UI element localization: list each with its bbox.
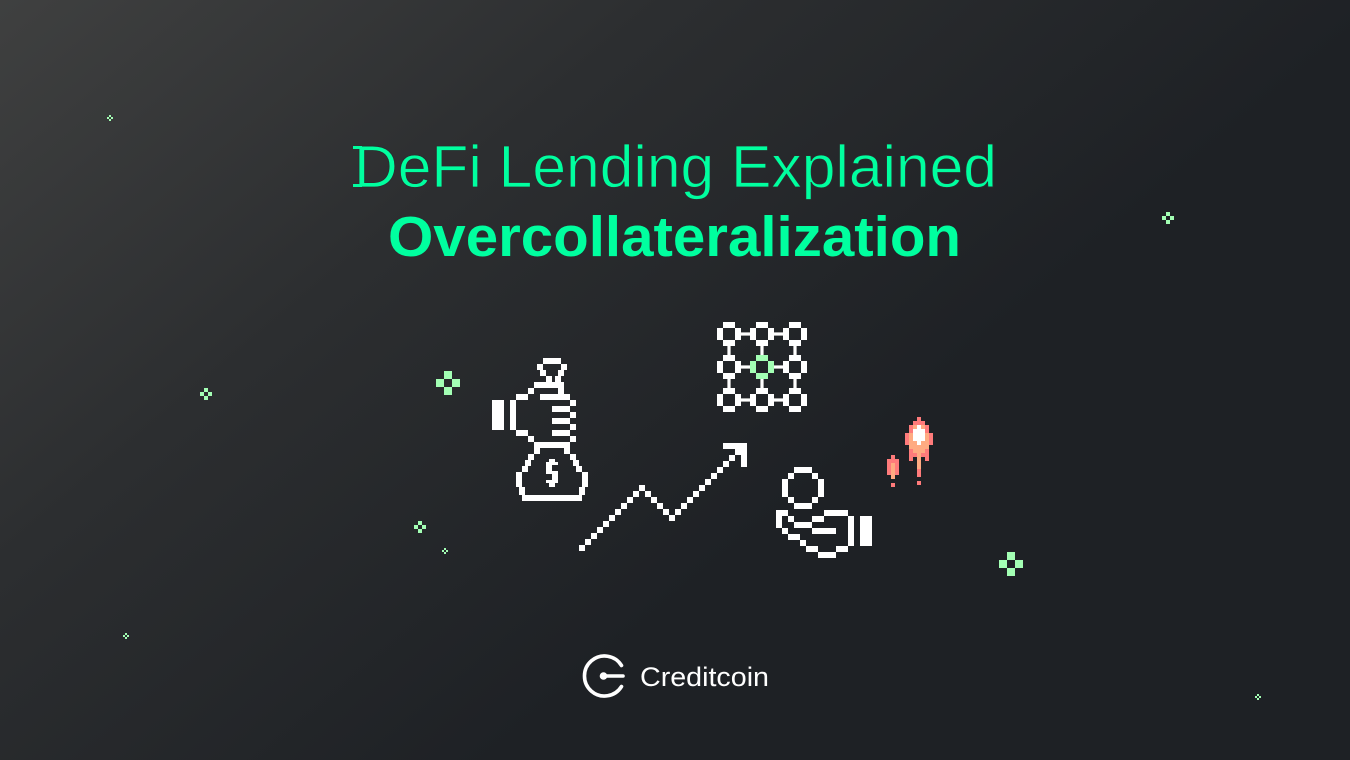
outer nodes bbox=[717, 322, 807, 412]
dollar sign bbox=[546, 459, 558, 487]
icon: large rocket bbox=[905, 417, 933, 485]
sparkle bbox=[999, 552, 1023, 576]
title line: DeFi Lending Explained: DeFi Lending Explained bbox=[354, 134, 997, 200]
center node bbox=[750, 355, 774, 379]
coin bbox=[782, 467, 824, 509]
sparkle bbox=[436, 371, 460, 395]
icon: small rocket bbox=[887, 455, 899, 487]
logo mark bbox=[584, 656, 623, 696]
sparkles bbox=[107, 115, 1261, 700]
thumb block bbox=[492, 400, 504, 430]
sparkle bbox=[1162, 212, 1174, 224]
connectors bbox=[727, 332, 797, 402]
chart: rising trend arrow bbox=[579, 443, 747, 551]
bag body bbox=[516, 442, 588, 501]
sparkle bbox=[414, 521, 426, 533]
hand outline bbox=[510, 388, 576, 442]
open hand bbox=[776, 510, 854, 558]
sparkle bbox=[1255, 694, 1261, 700]
logo wordmark: Creditcoin bbox=[640, 662, 769, 692]
sparkle bbox=[442, 548, 448, 554]
sparkle bbox=[123, 633, 129, 639]
title line: Overcollateralization: Overcollateralization bbox=[388, 205, 961, 269]
icon: blockchain network grid bbox=[717, 322, 807, 412]
sparkle bbox=[200, 388, 212, 400]
logo: Creditcoin bbox=[584, 656, 769, 696]
icon: hand receiving coin bbox=[776, 467, 872, 558]
icon: hand holding money bag bbox=[492, 358, 588, 501]
sparkle bbox=[107, 115, 113, 121]
title bbox=[353, 134, 997, 269]
thumb block bbox=[860, 516, 872, 546]
bag tie bbox=[534, 358, 567, 394]
title slab serifs on the D bbox=[353, 146, 362, 187]
